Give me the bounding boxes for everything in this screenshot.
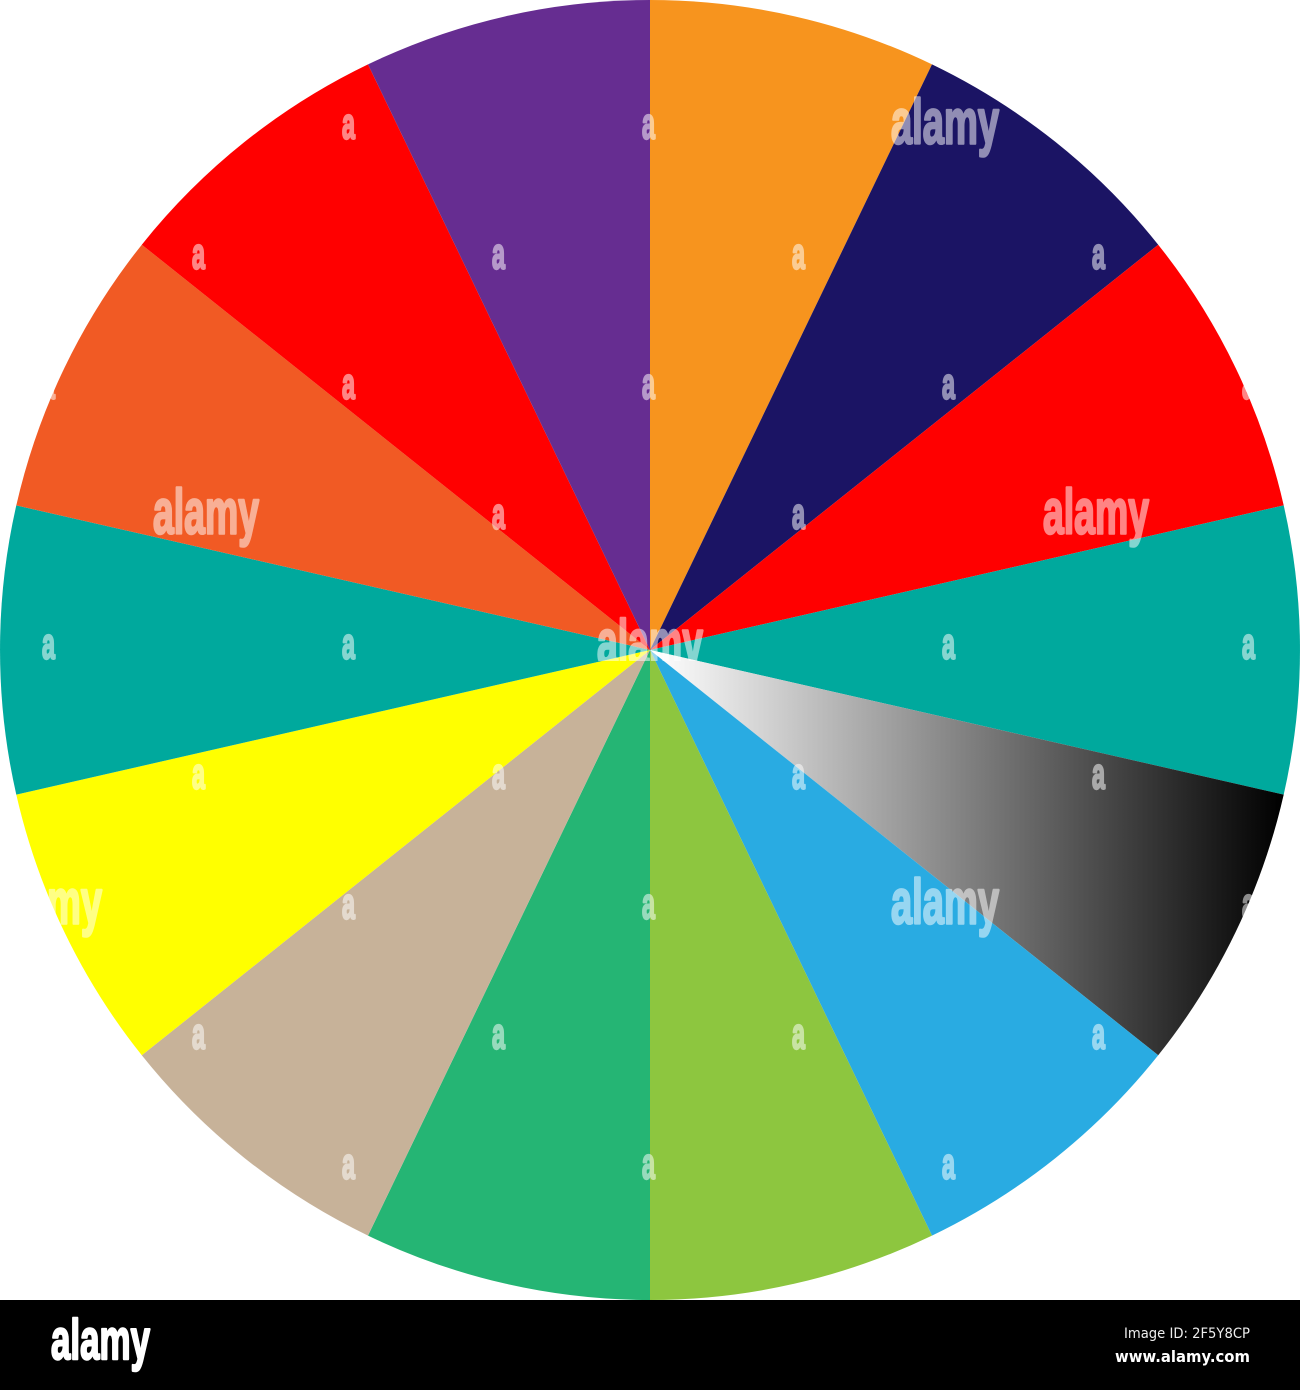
segment: tan: [142, 650, 650, 1236]
watermark: small letter grid: a: [1242, 880, 1255, 928]
website: www.alamy.com: [1115, 1347, 1250, 1366]
image id: Image ID: 2F5Y8CP: [1124, 1326, 1250, 1342]
watermark: small letter grid: a: [492, 230, 505, 278]
watermark: small letter grid: a: [642, 360, 655, 408]
footer logo: alamy: [51, 1308, 150, 1372]
watermark: alamy words: alamy: [891, 868, 999, 938]
watermark: small letter grid: a: [342, 100, 355, 148]
segment: navy: [650, 64, 1158, 650]
segment: white to black gradient: [650, 650, 1284, 1055]
watermark: small letter grid: a: [642, 1140, 655, 1188]
watermark: small letter grid: a: [342, 880, 355, 928]
watermark: small letter grid: a: [642, 100, 655, 148]
watermark: small letter grid: a: [1242, 360, 1255, 408]
watermark: small letter grid: a: [792, 230, 805, 278]
segment: light green: [650, 650, 932, 1300]
segment: green: [368, 650, 650, 1300]
watermark: alamy words: alamy: [597, 608, 703, 678]
watermark: small letter grid: a: [492, 1010, 505, 1058]
watermark: small letter grid: a: [192, 750, 205, 798]
segment: red right: [650, 245, 1284, 650]
watermark: alamy words: alamy: [891, 88, 999, 158]
segment: purple: [368, 0, 650, 650]
segment: orange: [650, 0, 932, 650]
segment: orange red: [16, 245, 650, 650]
watermark: alamy words: alamy: [153, 478, 259, 548]
segment: sky blue: [650, 650, 1158, 1236]
watermark: small letter grid: a: [192, 230, 205, 278]
watermark: small letter grid: a: [42, 620, 55, 668]
watermark: small letter grid: a: [492, 490, 505, 538]
watermark: small letter grid: [42, 100, 1255, 1188]
watermark: small letter grid: a: [342, 360, 355, 408]
watermark: small letter grid: a: [942, 620, 955, 668]
watermark: small letter grid: a: [1092, 230, 1105, 278]
watermark: alamy words: alamy: [1043, 478, 1149, 548]
watermark: small letter grid: a: [342, 1140, 355, 1188]
watermark: small letter grid: a: [1092, 1010, 1105, 1058]
segment: teal left: [0, 505, 650, 795]
watermark: small letter grid: a: [792, 1010, 805, 1058]
segment: teal right: [650, 505, 1300, 795]
watermark: alamy words: [0, 88, 1149, 938]
watermark: small letter grid: a: [42, 360, 55, 408]
segment: yellow: [16, 650, 650, 1055]
watermark: small letter grid: a: [342, 620, 355, 668]
segment: red left: [142, 64, 650, 650]
watermark: small letter grid: a: [1242, 620, 1255, 668]
watermark: small letter grid: a: [642, 880, 655, 928]
footer bar: [0, 1300, 1300, 1390]
watermark: small letter grid: a: [792, 750, 805, 798]
watermark: small letter grid: a: [792, 490, 805, 538]
watermark: small letter grid: a: [1092, 750, 1105, 798]
watermark: small letter grid: a: [942, 360, 955, 408]
watermark: small letter grid: a: [942, 1140, 955, 1188]
watermark: small letter grid: a: [492, 750, 505, 798]
watermark: small letter grid: a: [192, 1010, 205, 1058]
